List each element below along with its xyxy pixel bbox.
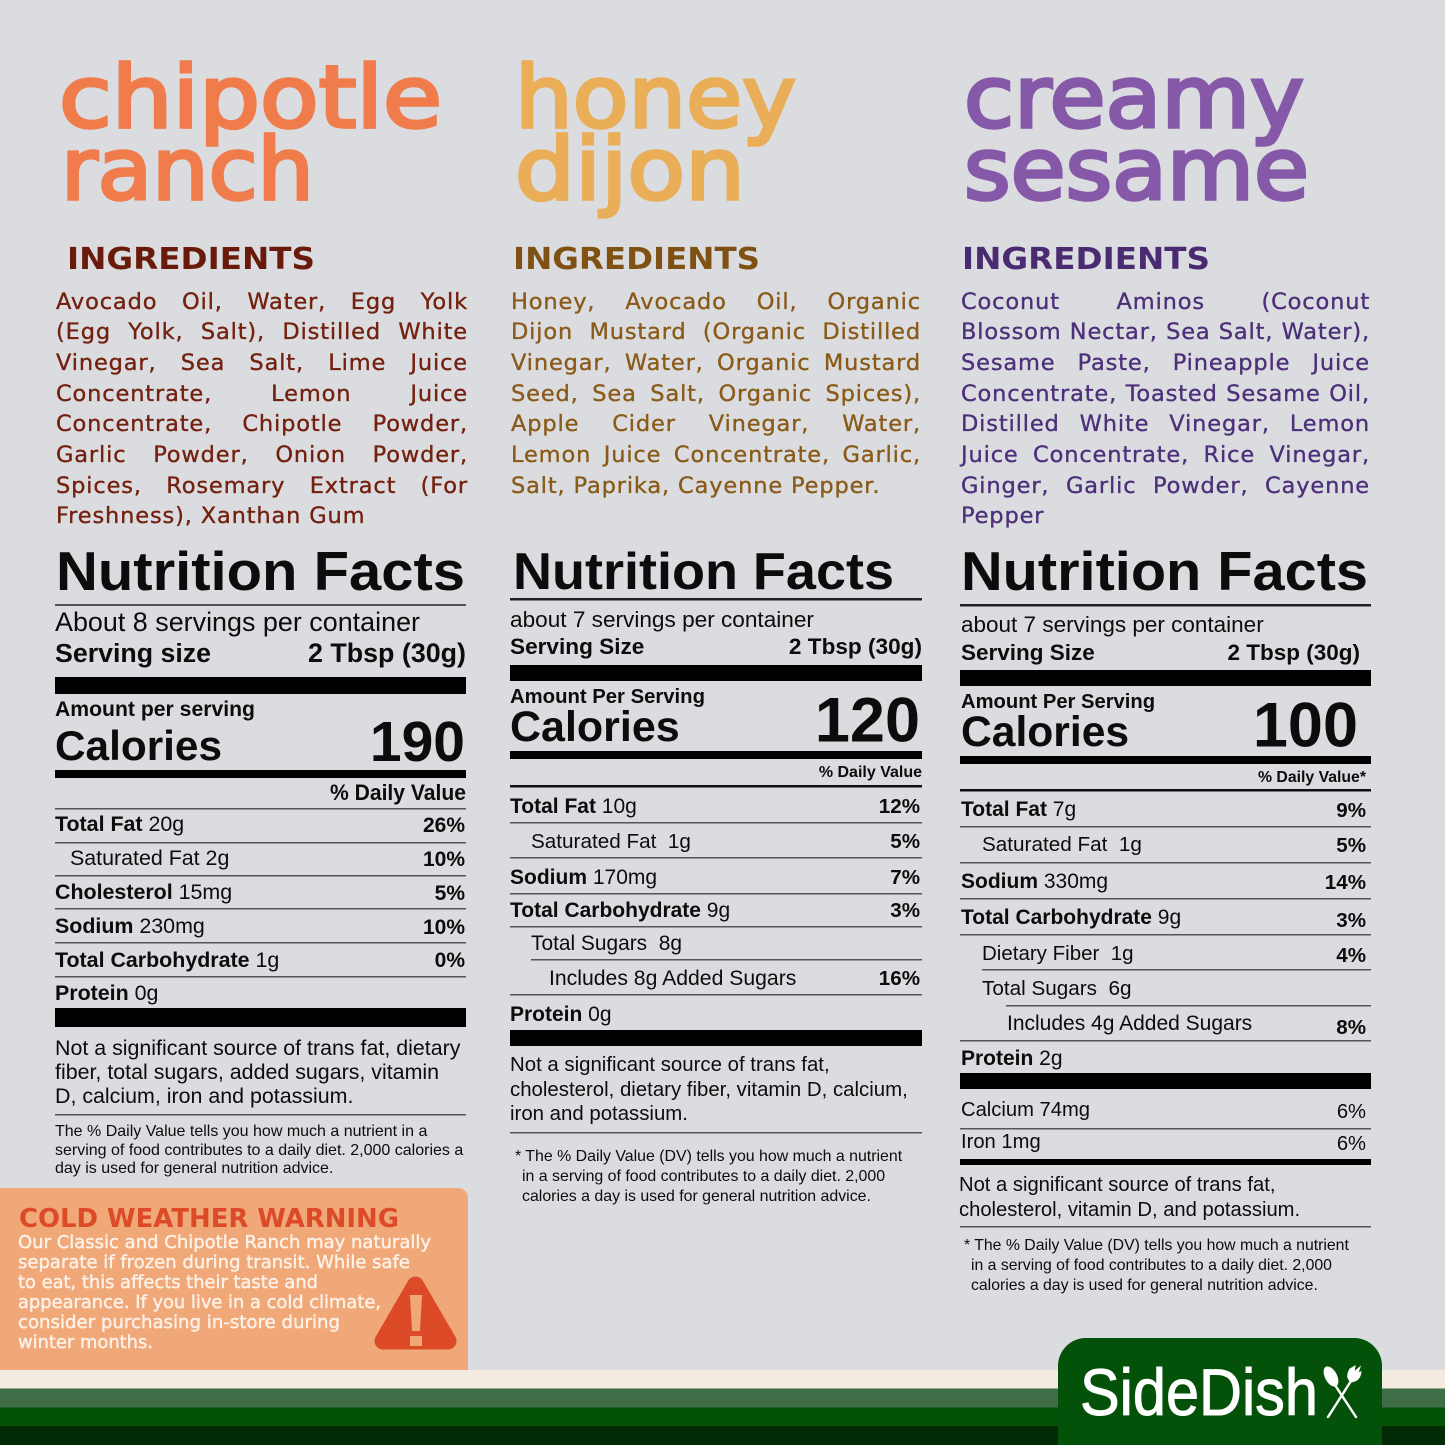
panel: honey dijon nutrition facts: iron and potassium.: [510, 1103, 688, 1125]
panel: chipotle ranch nutrition facts: D, calcium, iron and potassium.: [55, 1084, 353, 1108]
footer stripes: [0, 1370, 1445, 1445]
text block: honey ingredients: Salt, Paprika, Cayenne Pepper.: [511, 473, 880, 499]
panel: honey dijon nutrition facts: [510, 543, 922, 1205]
panel: chipotle ranch nutrition facts: Calories: [55, 722, 222, 769]
panel: creamy sesame nutrition facts: Not a significant source of trans fat,: [959, 1174, 1275, 1196]
panel: creamy sesame nutrition facts: Iron 1mg: [961, 1131, 1041, 1153]
panel: honey dijon nutrition facts: 7%: [890, 866, 920, 889]
panel: honey dijon nutrition facts: Not a significant source of trans fat,: [510, 1054, 830, 1076]
panel: chipotle ranch nutrition facts: Amount per serving: [55, 698, 255, 721]
panel: chipotle ranch nutrition facts: Total Fat 20g: [55, 812, 184, 836]
text block: chipotle ingredients: Avocado Oil, Water, Egg Yolk: [56, 288, 468, 314]
panel: chipotle ranch nutrition facts: Nutrition Facts: [56, 540, 465, 602]
panel: chipotle ranch nutrition facts: 10%: [423, 848, 465, 871]
text block: honey ingredients: [511, 288, 921, 499]
warning body text: to eat, this affects their taste and: [18, 1273, 318, 1293]
panel: chipotle ranch nutrition facts: Not a significant source of trans fat, dietary: [55, 1036, 461, 1060]
panel: chipotle ranch nutrition facts: Serving size: [55, 640, 211, 668]
logo: SideDish badge: [1058, 1338, 1382, 1445]
panel: chipotle ranch nutrition facts: fiber, total sugars, added sugars, vitamin: [55, 1060, 439, 1084]
panel: chipotle ranch nutrition facts: Total Carbohydrate 1g: [55, 948, 279, 972]
text block: chipotle ingredients: [56, 288, 468, 529]
panel: chipotle ranch nutrition facts: day is used for general nutrition advice.: [55, 1160, 333, 1177]
panel: creamy sesame nutrition facts: calories a day is used for general nutrition advice.: [971, 1277, 1318, 1294]
warning body text: appearance. If you live in a cold climate,: [18, 1293, 381, 1313]
panel: honey dijon nutrition facts: Amount Per Serving: [510, 686, 705, 708]
panel: honey dijon nutrition facts: about 7 servings per container: [510, 607, 814, 632]
panel: creamy sesame nutrition facts: Dietary Fiber 1g: [982, 942, 1134, 965]
text block: honey ingredients: Dijon Mustard (Organic Distilled: [511, 319, 921, 345]
text block: chipotle ingredients: Vinegar, Sea Salt, Lime Juice: [56, 350, 468, 376]
panel: creamy sesame nutrition facts: Saturated Fat 1g: [982, 833, 1142, 856]
panel: honey dijon title: dijon: [515, 120, 745, 220]
panel: creamy sesame title: [964, 50, 1309, 220]
panel: honey dijon nutrition facts: Nutrition Facts: [513, 543, 894, 601]
text block: chipotle ingredients: Concentrate, Chipotle Powder,: [56, 411, 468, 437]
logo wordmark: SideDish: [1080, 1355, 1318, 1429]
panel: creamy sesame nutrition facts: % Daily Value*: [1258, 769, 1367, 786]
panel: honey dijon nutrition facts: Protein 0g: [510, 1003, 612, 1026]
icon: crossed fork and spoon: [1321, 1364, 1361, 1417]
panel: chipotle ranch nutrition facts: 10%: [423, 916, 465, 939]
panel: honey dijon nutrition facts: Sodium 170mg: [510, 866, 657, 889]
panel: creamy sesame nutrition facts: Total Carbohydrate 9g: [961, 906, 1181, 929]
panel: creamy sesame title: sesame: [964, 120, 1309, 220]
text block: chipotle ingredients: (Egg Yolk, Salt), Distilled White: [56, 319, 468, 345]
panel: honey dijon nutrition facts: Includes 8g Added Sugars: [549, 967, 796, 990]
panel: chipotle ranch nutrition facts: Saturated Fat 2g: [70, 846, 229, 870]
text block: honey ingredients: Seed, Sea Salt, Organic Spices),: [511, 381, 921, 407]
heading: ingredients chipotle: INGREDIENTS: [67, 242, 315, 276]
text block: chipotle ingredients: Concentrate, Lemon Juice: [56, 381, 468, 407]
panel: chipotle ranch nutrition facts: About 8 servings per container: [55, 607, 420, 637]
panel: honey dijon nutrition facts: cholesterol, dietary fiber, vitamin D, calcium,: [510, 1079, 908, 1101]
panel: honey dijon nutrition facts: 3%: [890, 899, 920, 922]
panel: honey dijon nutrition facts: 5%: [890, 830, 920, 853]
text block: honey ingredients: Lemon Juice Concentrate, Garlic,: [511, 442, 921, 468]
text block: sesame ingredients: [960, 288, 1370, 529]
panel: creamy sesame nutrition facts: Serving Size: [961, 640, 1095, 665]
panel: creamy sesame nutrition facts: Total Fat 7g: [961, 798, 1076, 821]
panel: honey dijon nutrition facts: 16%: [879, 967, 920, 990]
text block: sesame ingredients: Coconut Aminos (Coconut: [961, 288, 1370, 314]
panel: creamy sesame nutrition facts: Calcium 74mg: [961, 1099, 1090, 1121]
panel: creamy sesame nutrition facts: 100: [1253, 690, 1358, 760]
panel: creamy sesame nutrition facts: about 7 servings per container: [961, 612, 1264, 637]
text block: sesame ingredients: Sesame Paste, Pineapple Juice: [961, 350, 1370, 376]
panel: chipotle ranch nutrition facts: [55, 540, 466, 1177]
panel: creamy sesame nutrition facts: 6%: [1337, 1101, 1366, 1123]
panel: creamy sesame nutrition facts: Calories: [961, 708, 1129, 756]
panel: chipotle ranch nutrition facts: 0%: [435, 949, 465, 972]
text block: sesame ingredients: Concentrate, Toasted Sesame Oil,: [961, 381, 1370, 407]
panel: creamy sesame nutrition facts: * The % Daily Value (DV) tells you how much a nutrient: [964, 1237, 1349, 1254]
panel: honey dijon nutrition facts: in a serving of food contributes to a daily diet. 2,000: [522, 1168, 885, 1185]
warning body text: separate if frozen during transit. While safe: [18, 1253, 410, 1273]
panel: honey dijon title: [515, 50, 796, 220]
panel: creamy sesame nutrition facts: in a serving of food contributes to a daily diet. 2,000: [971, 1257, 1332, 1274]
panel: chipotle ranch nutrition facts: Sodium 230mg: [55, 914, 205, 938]
panel: chipotle ranch title: [59, 50, 442, 220]
panel: creamy sesame nutrition facts: Protein 2g: [961, 1047, 1063, 1070]
heading: ingredients honey: INGREDIENTS: [513, 242, 760, 276]
panel: chipotle ranch nutrition facts: Cholesterol 15mg: [55, 880, 232, 904]
text block: honey ingredients: Apple Cider Vinegar, Water,: [511, 411, 921, 437]
panel: honey dijon nutrition facts: 120: [815, 686, 920, 756]
text block: sesame ingredients: Juice Concentrate, Rice Vinegar,: [961, 442, 1370, 468]
panel: creamy sesame nutrition facts: 14%: [1325, 871, 1366, 894]
panel: chipotle ranch nutrition facts: 26%: [423, 814, 465, 837]
panel: honey dijon title: honey: [515, 50, 796, 148]
panel: honey dijon nutrition facts: Total Fat 10g: [510, 795, 637, 818]
panel: honey dijon nutrition facts: 2 Tbsp (30g): [789, 634, 922, 659]
text block: sesame ingredients: Ginger, Garlic Powder, Cayenne: [961, 473, 1370, 499]
panel: chipotle ranch title: chipotle: [59, 50, 442, 148]
text block: honey ingredients: Honey, Avocado Oil, Organic: [511, 288, 921, 314]
panel: honey dijon nutrition facts: Serving Size: [510, 634, 644, 659]
panel: creamy sesame nutrition facts: Nutrition Facts: [961, 540, 1368, 602]
text block: sesame ingredients: Distilled White Vinegar, Lemon: [961, 411, 1370, 437]
panel: creamy sesame nutrition facts: 3%: [1336, 909, 1366, 932]
panel: chipotle ranch nutrition facts: 190: [370, 710, 465, 774]
callout: cold weather warning: [0, 1188, 468, 1370]
panel: honey dijon nutrition facts: Total Sugars 8g: [531, 932, 682, 955]
panel: creamy sesame nutrition facts: Amount Per Serving: [961, 691, 1155, 713]
warning body text: Our Classic and Chipotle Ranch may naturally: [18, 1233, 431, 1253]
panel: creamy sesame nutrition facts: 9%: [1336, 799, 1366, 822]
text block: chipotle ingredients: Freshness), Xanthan Gum: [56, 503, 365, 529]
warning heading: COLD WEATHER WARNING: [19, 1204, 399, 1234]
panel: creamy sesame nutrition facts: 8%: [1336, 1016, 1366, 1039]
heading: ingredients sesame: INGREDIENTS: [962, 242, 1210, 276]
panel: honey dijon nutrition facts: % Daily Value: [819, 764, 922, 781]
text block: sesame ingredients: Blossom Nectar, Sea Salt, Water),: [961, 319, 1370, 345]
panel: creamy sesame title: creamy: [964, 50, 1304, 148]
panel: honey dijon nutrition facts: Total Carbohydrate 9g: [510, 899, 730, 922]
panel: chipotle ranch nutrition facts: Protein 0g: [55, 981, 158, 1005]
panel: creamy sesame nutrition facts: Sodium 330mg: [961, 870, 1108, 893]
panel: honey dijon nutrition facts: * The % Daily Value (DV) tells you how much a nutrient: [515, 1148, 903, 1165]
warning body text: consider purchasing in-store during: [18, 1313, 340, 1333]
warning body text: winter months.: [18, 1333, 153, 1353]
text block: chipotle ingredients: Garlic Powder, Onion Powder,: [56, 442, 468, 468]
text block: sesame ingredients: Pepper: [961, 503, 1044, 529]
panel: creamy sesame nutrition facts: [959, 540, 1371, 1294]
warning body text: [18, 1233, 431, 1353]
panel: creamy sesame nutrition facts: 6%: [1337, 1133, 1366, 1155]
panel: honey dijon nutrition facts: Saturated Fat 1g: [531, 830, 691, 853]
icon: warning triangle: [383, 1285, 448, 1346]
panel: chipotle ranch nutrition facts: 5%: [435, 882, 465, 905]
panel: creamy sesame nutrition facts: cholesterol, vitamin D, and potassium.: [959, 1199, 1300, 1221]
panel: creamy sesame nutrition facts: Total Sugars 6g: [982, 977, 1132, 1000]
panel: chipotle ranch nutrition facts: % Daily Value: [330, 780, 466, 805]
panel: creamy sesame nutrition facts: Includes 4g Added Sugars: [1007, 1012, 1252, 1035]
panel: chipotle ranch nutrition facts: 2 Tbsp (30g): [308, 638, 466, 668]
panel: honey dijon nutrition facts: calories a day is used for general nutrition advice.: [522, 1188, 871, 1205]
panel: chipotle ranch nutrition facts: serving of food contributes to a daily diet. 2,000 calories a: [55, 1142, 463, 1159]
panel: creamy sesame nutrition facts: 2 Tbsp (30g): [1227, 640, 1360, 665]
text block: honey ingredients: Vinegar, Water, Organic Mustard: [511, 350, 921, 376]
panel: creamy sesame nutrition facts: 4%: [1336, 944, 1366, 967]
panel: honey dijon nutrition facts: Calories: [510, 703, 680, 751]
panel: honey dijon nutrition facts: 12%: [879, 795, 920, 818]
panel: creamy sesame nutrition facts: 5%: [1336, 834, 1366, 857]
panel: chipotle ranch title: ranch: [61, 120, 314, 220]
text block: chipotle ingredients: Spices, Rosemary Extract (For: [56, 473, 468, 499]
panel: chipotle ranch nutrition facts: The % Daily Value tells you how much a nutrient in a: [55, 1123, 427, 1140]
